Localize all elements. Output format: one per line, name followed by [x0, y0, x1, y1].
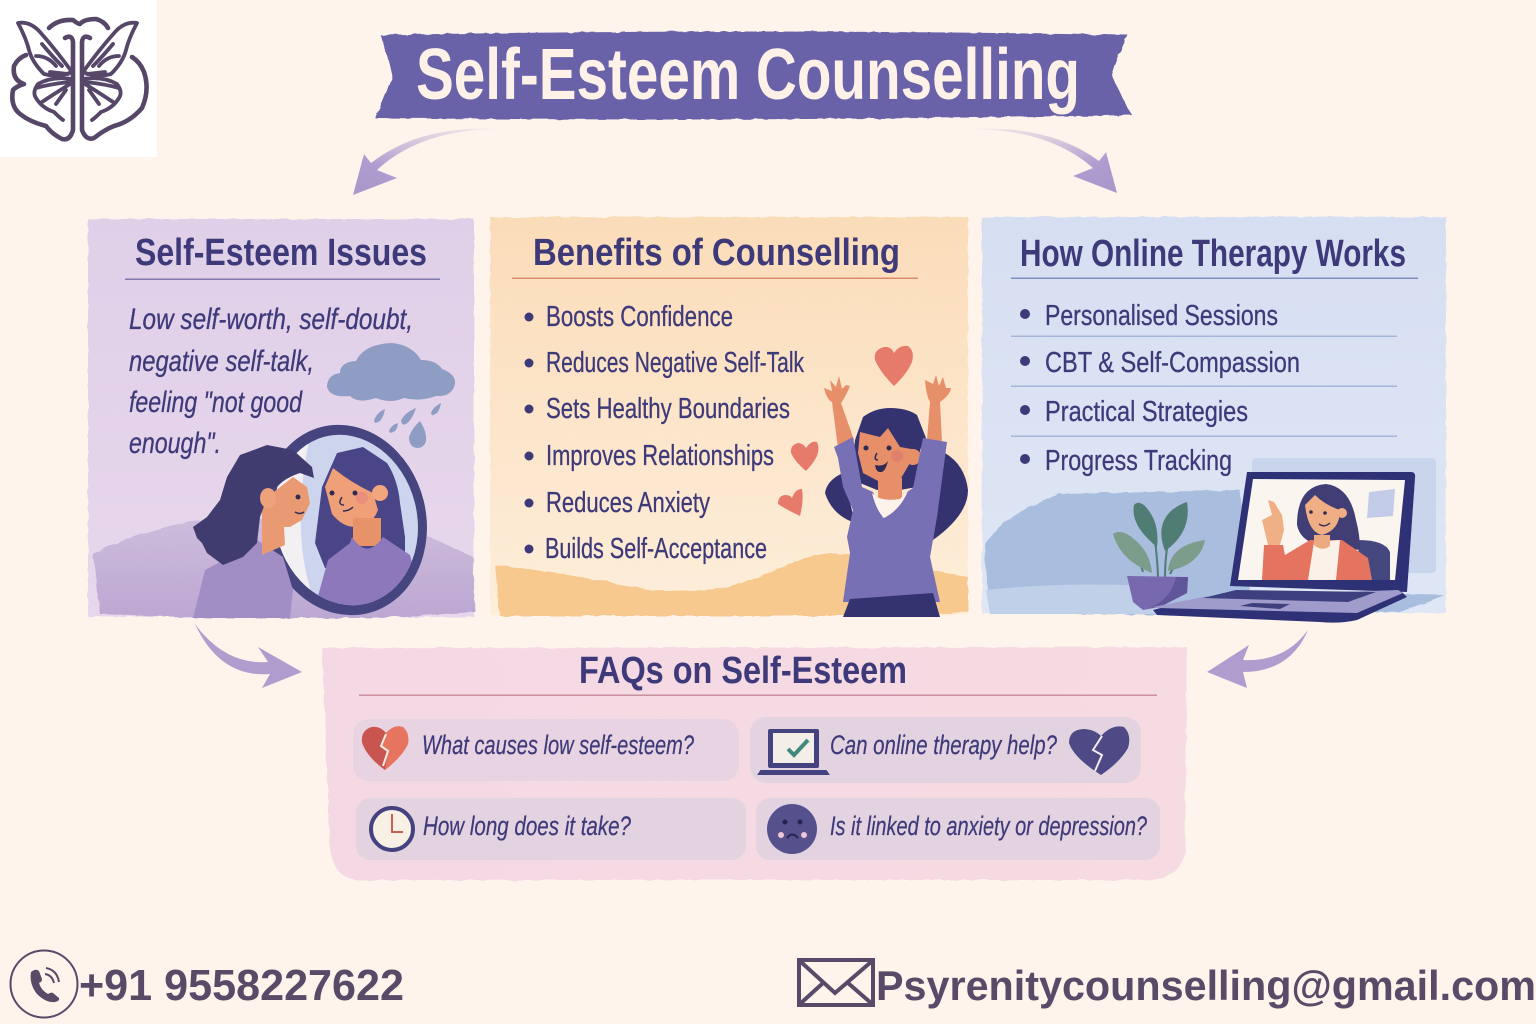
list: therapy steps: CBT & Self-Compassion: [1045, 347, 1300, 379]
title banner: [375, 32, 1132, 119]
contact: email: [799, 960, 1536, 1009]
list: therapy steps: Practical Strategies: [1045, 396, 1248, 428]
arrow: title to online therapy: [973, 129, 1117, 193]
faq item: online therapy: Can online therapy help?: [830, 730, 1057, 760]
panel: FAQs on self-esteem: [322, 647, 1187, 880]
text: issues description: [129, 303, 413, 460]
list: therapy steps: Progress Tracking: [1045, 445, 1232, 477]
list: benefits: Reduces Negative Self-Talk: [546, 347, 804, 379]
illustration: happy woman: [824, 375, 968, 617]
text: issues description: feeling "not good: [129, 386, 303, 419]
heading: how online therapy works: How Online Therapy Works: [1020, 233, 1406, 275]
illustration: mirror and reflection: [264, 424, 427, 616]
faq item: how long: How long does it take?: [423, 811, 631, 841]
arrow: issues to FAQs: [195, 624, 302, 688]
illustration: potted plant: [1113, 502, 1205, 610]
arrow: title to issues: [353, 129, 497, 195]
faq item: causes: [353, 719, 739, 781]
heading: self-esteem issues: Self-Esteem Issues: [135, 232, 427, 274]
heading: benefits: Benefits of Counselling: [533, 232, 900, 274]
panel: how online therapy works: [982, 217, 1446, 623]
faq item: anxiety or depression: Is it linked to anxiety or depression?: [830, 811, 1147, 841]
icon: hearts: [778, 346, 913, 516]
text: issues description: negative self-talk,: [129, 345, 314, 378]
panel: self-esteem issues: [88, 219, 475, 633]
list: therapy steps: Personalised Sessions: [1045, 300, 1278, 332]
list: therapy steps: [1011, 300, 1397, 477]
email address: Psyrenitycounselling@gmail.com: [876, 962, 1536, 1009]
contact: phone: [10, 950, 404, 1018]
panel: benefits of counselling: [490, 217, 968, 617]
list: benefits: [524, 301, 804, 565]
title: Self-Esteem Counselling: [416, 35, 1080, 115]
illustration: laptop with therapist: [1153, 472, 1415, 623]
illustration: woman looking in mirror: [193, 445, 314, 618]
arrow: online therapy to FAQs: [1207, 630, 1308, 688]
list: benefits: Improves Relationships: [546, 440, 774, 472]
text: issues description: enough".: [129, 427, 221, 460]
icon: rain cloud: [327, 343, 455, 448]
text: issues description: Low self-worth, self-doubt,: [129, 303, 413, 336]
faq item: anxiety or depression: [756, 798, 1160, 860]
faq item: how long: [356, 798, 746, 860]
logo: butterfly brain: [0, 0, 157, 157]
faq item: online therapy: [750, 717, 1141, 783]
faq item: causes: What causes low self-esteem?: [422, 730, 694, 760]
list: benefits: Boosts Confidence: [546, 301, 733, 333]
list: benefits: Reduces Anxiety: [546, 487, 710, 519]
list: benefits: Sets Healthy Boundaries: [546, 393, 790, 425]
list: benefits: Builds Self-Acceptance: [545, 533, 767, 565]
heading: FAQs: FAQs on Self-Esteem: [579, 650, 907, 692]
phone number: +91 9558227622: [79, 961, 404, 1010]
